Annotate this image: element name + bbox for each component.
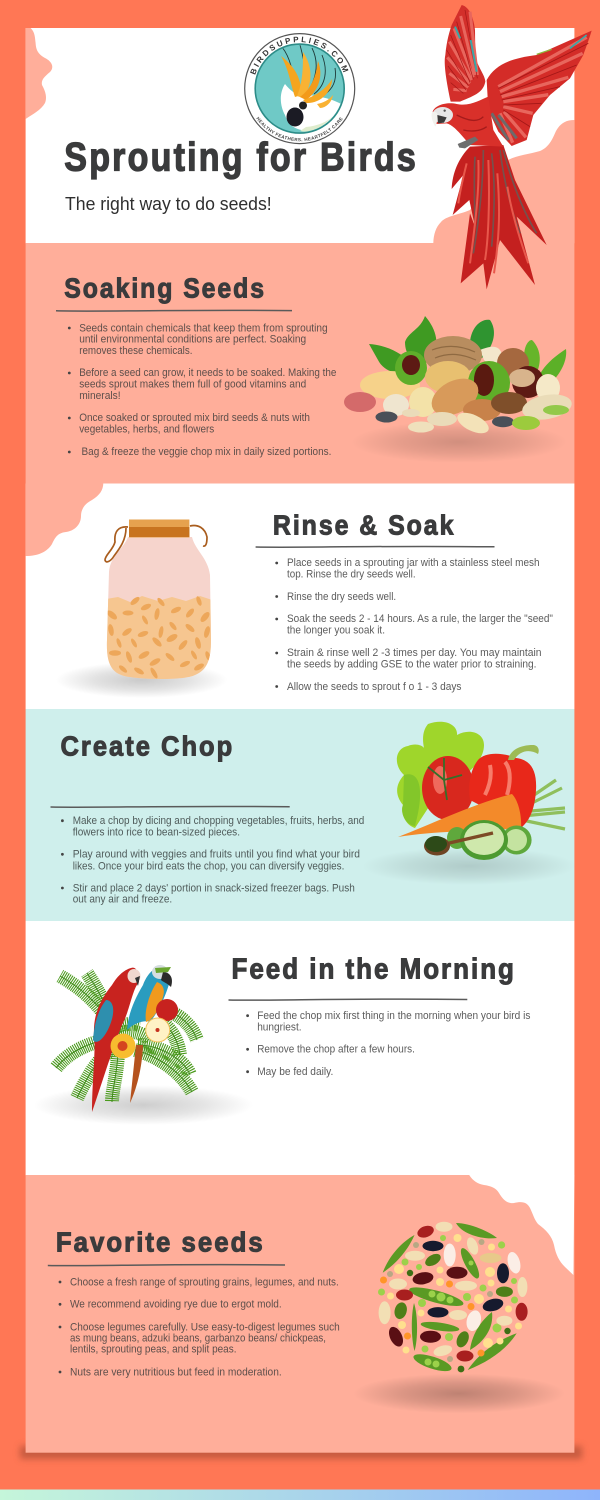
panel: rinse and soak xyxy=(26,484,574,709)
bullet list: chop xyxy=(61,815,364,906)
bullet list: rinse: Place seeds in a sprouting jar with a stainless steel mesh xyxy=(287,557,540,569)
bullet list: rinse xyxy=(275,557,553,693)
subtitle: The right way to do seeds! xyxy=(65,194,272,214)
heading underline xyxy=(228,999,467,1000)
bullet list: morning: May be fed daily. xyxy=(257,1066,333,1078)
bullet list: chop: likes. Once your bird eats the chop, you can diversify veggies. xyxy=(73,860,344,872)
bullet list: morning: Feed the chop mix first thing in the morning when your bird is xyxy=(257,1010,530,1022)
bullet list: soaking xyxy=(68,322,336,458)
bullet list: soaking: seeds sprout makes them full of good vitamins and xyxy=(79,378,306,390)
heading: rinse and soak: Rinse & Soak xyxy=(273,509,455,540)
bullet list: soaking: Before a seed can grow, it needs to be soaked. Making the xyxy=(79,367,336,379)
panel: header xyxy=(26,28,574,244)
bullet list: favorite seeds: We recommend avoiding rye due to ergot mold. xyxy=(70,1299,282,1311)
bullet list: rinse: top. Rinse the dry seeds well. xyxy=(287,568,416,580)
decorative blob: right xyxy=(433,120,574,244)
heading underline xyxy=(48,1265,285,1266)
illustration: circle of beans and legumes xyxy=(353,1222,565,1414)
panel: soaking seeds xyxy=(26,243,574,484)
illustration: vegetables xyxy=(362,722,576,885)
bullet list: favorite seeds: Nuts are very nutritious but feed in moderation. xyxy=(70,1366,282,1378)
heading: create chop: Create Chop xyxy=(60,731,234,762)
heading underline xyxy=(256,545,494,548)
panel: feed in the morning xyxy=(26,921,574,1176)
panel drop shadow xyxy=(20,1446,582,1459)
heading underline xyxy=(50,805,290,808)
decorative blob: white corner xyxy=(469,1175,574,1275)
bullet list: soaking: removes these chemicals. xyxy=(79,345,192,357)
illustration: sprouting jar xyxy=(67,520,216,696)
heading: favorite seeds: Favorite seeds xyxy=(56,1227,265,1258)
decorative blob: top left xyxy=(26,28,52,119)
macaw body and head xyxy=(432,97,503,148)
logo: birdsupplies.com xyxy=(244,33,356,144)
bullet list: soaking: minerals! xyxy=(79,390,121,402)
title: Sprouting for Birds xyxy=(64,136,418,180)
bullet list: rinse: Allow the seeds to sprout f o 1 - 3 days xyxy=(287,681,462,693)
bullet list: morning xyxy=(246,1010,530,1078)
bullet list: favorite seeds: lentils, sprouting peas, and split peas. xyxy=(70,1344,236,1356)
macaw right wing xyxy=(487,31,592,146)
illustration: flying scarlet macaw xyxy=(432,5,592,289)
bullet list: chop: Play around with veggies and fruits until you find what your bird xyxy=(73,849,360,861)
logo bottom ring text: HEALTHY FEATHERS. HEARTFELT CARE xyxy=(256,116,343,142)
bullet list: soaking: vegetables, herbs, and flowers xyxy=(79,424,214,436)
bullet list: rinse: Soak the seeds 2 - 14 hours. As a rule, the larger the "seed" xyxy=(287,613,553,625)
bullet list: chop: out any air and freeze. xyxy=(73,894,172,906)
macaw left wing xyxy=(445,5,485,102)
panel: create chop xyxy=(26,709,576,921)
bullet list: soaking: Bag & freeze the veggie chop mix in daily sized portions. xyxy=(82,446,331,458)
bottom gradient band xyxy=(0,1490,600,1500)
heading: feed in the morning: Feed in the Morning xyxy=(232,953,516,985)
heading underline xyxy=(56,309,292,312)
bullet list: chop: flowers into rice to bean-sized pieces. xyxy=(73,826,240,838)
logo top ring text: BIRDSUPPLIES.COM xyxy=(250,36,348,75)
bullet list: morning: hungriest. xyxy=(257,1021,302,1033)
bullet list: soaking: Once soaked or sprouted mix bird seeds & nuts with xyxy=(79,412,310,424)
bullet list: rinse: Rinse the dry seeds well. xyxy=(287,591,396,603)
bullet list: chop: Stir and place 2 days' portion in snack-sized freezer bags. Push xyxy=(73,882,355,894)
macaw tail feathers xyxy=(452,145,547,289)
bullet list: chop: Make a chop by dicing and chopping vegetables, fruits, herbs, and xyxy=(73,815,364,827)
bullet list: morning: Remove the chop after a few hours. xyxy=(257,1044,415,1056)
panel: favorite seeds xyxy=(26,1175,574,1453)
bullet list: favorite seeds: Choose a fresh range of sprouting grains, legumes, and nuts. xyxy=(70,1276,339,1288)
decorative blob: rinse corner xyxy=(26,484,103,556)
bullet list: rinse: Strain & rinse well 2 -3 times per day. You may maintain xyxy=(287,647,542,659)
heading: soaking seeds: Soaking Seeds xyxy=(64,273,266,304)
bullet list: favorite seeds: Choose legumes carefully. Use easy-to-digest legumes such xyxy=(70,1321,340,1333)
bullet list: favorite seeds xyxy=(59,1276,340,1378)
illustration: pile of nuts xyxy=(344,316,574,463)
bullet list: soaking: Seeds contain chemicals that keep them from sprouting xyxy=(79,322,328,334)
illustration: two macaws on palm leaves xyxy=(34,965,254,1125)
bullet list: rinse: the longer you soak it. xyxy=(287,624,385,636)
bullet list: soaking: until environmental conditions are perfect. Soaking xyxy=(79,334,306,346)
bullet list: rinse: the seeds by adding GSE to the water prior to straining. xyxy=(287,658,536,670)
bullet list: favorite seeds: as mung beans, adzuki beans, garbanzo beans/ chickpeas, xyxy=(70,1332,326,1344)
